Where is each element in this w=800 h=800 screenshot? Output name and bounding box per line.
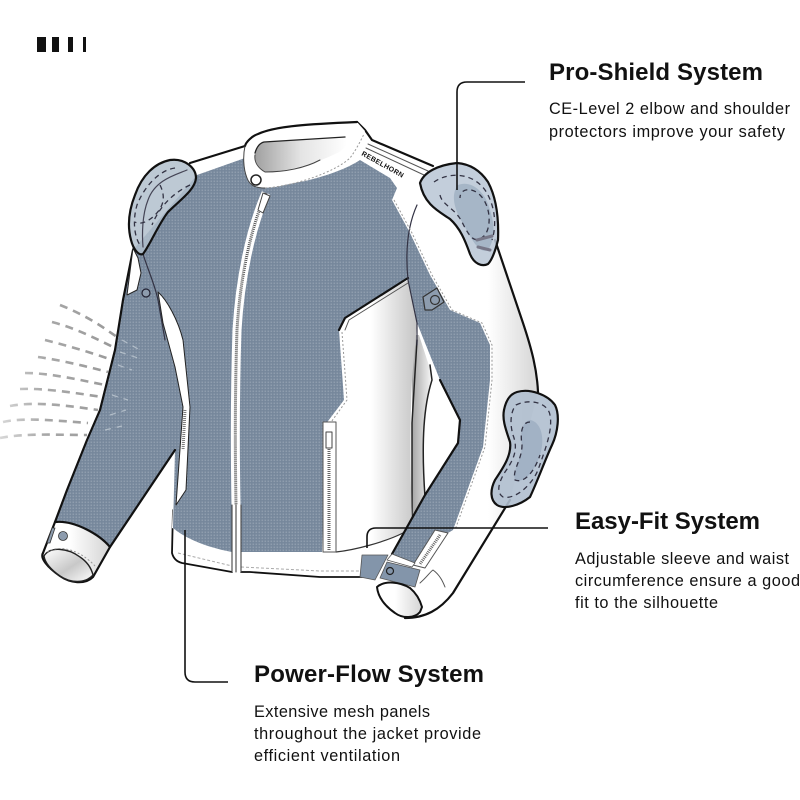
collar inner top line <box>255 137 345 153</box>
strap button <box>386 568 394 574</box>
callout: Pro-Shield System: protectors improve your safety <box>549 123 786 141</box>
waist band <box>172 528 367 577</box>
callout: Easy-Fit System: fit to the silhouette <box>575 594 718 612</box>
right shoulder pad <box>420 163 498 265</box>
shoulder outlines <box>190 122 433 166</box>
waist strap <box>360 555 388 580</box>
right sleeve zipper <box>413 530 448 568</box>
waist band top line <box>336 533 403 552</box>
right sleeve outer outline <box>405 240 538 618</box>
right pocket slider <box>326 432 332 448</box>
center zipper <box>235 193 266 572</box>
airflow lines <box>0 305 117 438</box>
jacket illustration <box>42 122 558 618</box>
callout line: Pro-Shield <box>457 82 525 190</box>
callout: Easy-Fit System: Easy-Fit System <box>575 508 760 535</box>
right pocket zipper panel <box>323 422 336 552</box>
callout: Power-Flow System: Power-Flow System <box>254 661 484 688</box>
tab button <box>430 296 440 304</box>
left shoulder strip <box>127 248 141 295</box>
callout: Pro-Shield System <box>549 59 791 141</box>
white panel stitching <box>329 200 492 530</box>
sleeve seam <box>407 205 417 345</box>
shoulder tab <box>423 288 444 310</box>
airflow lines through mesh <box>105 340 140 430</box>
callout: Power-Flow System <box>254 661 484 765</box>
collar snap <box>251 175 261 185</box>
left cuff <box>42 522 110 582</box>
right cuff opening <box>377 583 422 617</box>
shoulders and yoke <box>133 122 433 552</box>
callout: Power-Flow System: efficient ventilation <box>254 747 400 765</box>
right sleeve <box>378 166 538 618</box>
left cuff tab <box>47 528 55 543</box>
waist band stitching <box>178 553 362 571</box>
collar <box>244 122 365 188</box>
left side white sliver <box>158 292 190 505</box>
callout: Power-Flow System: Extensive mesh panels <box>254 703 430 721</box>
callout: Easy-Fit System: Adjustable sleeve and waist <box>575 550 789 568</box>
left cuff button <box>58 532 68 540</box>
callout: Pro-Shield System: CE-Level 2 elbow and shoulder <box>549 100 791 118</box>
panel top white band <box>345 283 408 330</box>
mesh panel <box>55 158 490 568</box>
center zipper slider <box>258 193 270 213</box>
collar inner <box>255 137 347 172</box>
left cuff stitching <box>47 548 95 566</box>
collar inner bottom line <box>255 155 320 172</box>
callout line: Easy-Fit <box>367 528 548 548</box>
waist band outline <box>172 510 362 577</box>
sleeve strap <box>380 562 420 587</box>
callout: Easy-Fit System: circumference ensure a good <box>575 572 800 590</box>
brand name: REBELHORN <box>360 151 405 180</box>
left arm button <box>142 289 150 297</box>
back lining of jacket <box>412 335 432 520</box>
callout line: Power-Flow <box>185 530 228 682</box>
left arm seam <box>143 254 165 340</box>
sleeve strap band <box>387 554 415 567</box>
collar left edge <box>244 146 265 188</box>
callout: Pro-Shield System: Pro-Shield System <box>549 59 763 86</box>
mesh outlines <box>55 250 460 554</box>
collar stitching <box>265 134 364 188</box>
left cuff opening <box>44 549 93 582</box>
right sleeve zipper teeth <box>420 535 440 564</box>
left shoulder pad <box>129 160 196 254</box>
right cuff seam <box>420 570 445 587</box>
yoke double line <box>366 144 428 175</box>
logo marks <box>37 37 86 52</box>
callout: Easy-Fit System <box>575 508 800 612</box>
left pocket zipper <box>183 410 185 450</box>
right pocket zipper teeth <box>328 437 330 550</box>
collar outline <box>245 122 357 146</box>
center zipper rails <box>232 505 241 572</box>
torso white panel <box>240 278 417 560</box>
back lining outlines <box>412 340 432 520</box>
elbow pad <box>491 391 558 507</box>
callout: Power-Flow System: throughout the jacket provide <box>254 725 481 743</box>
center zipper teeth <box>235 193 266 505</box>
